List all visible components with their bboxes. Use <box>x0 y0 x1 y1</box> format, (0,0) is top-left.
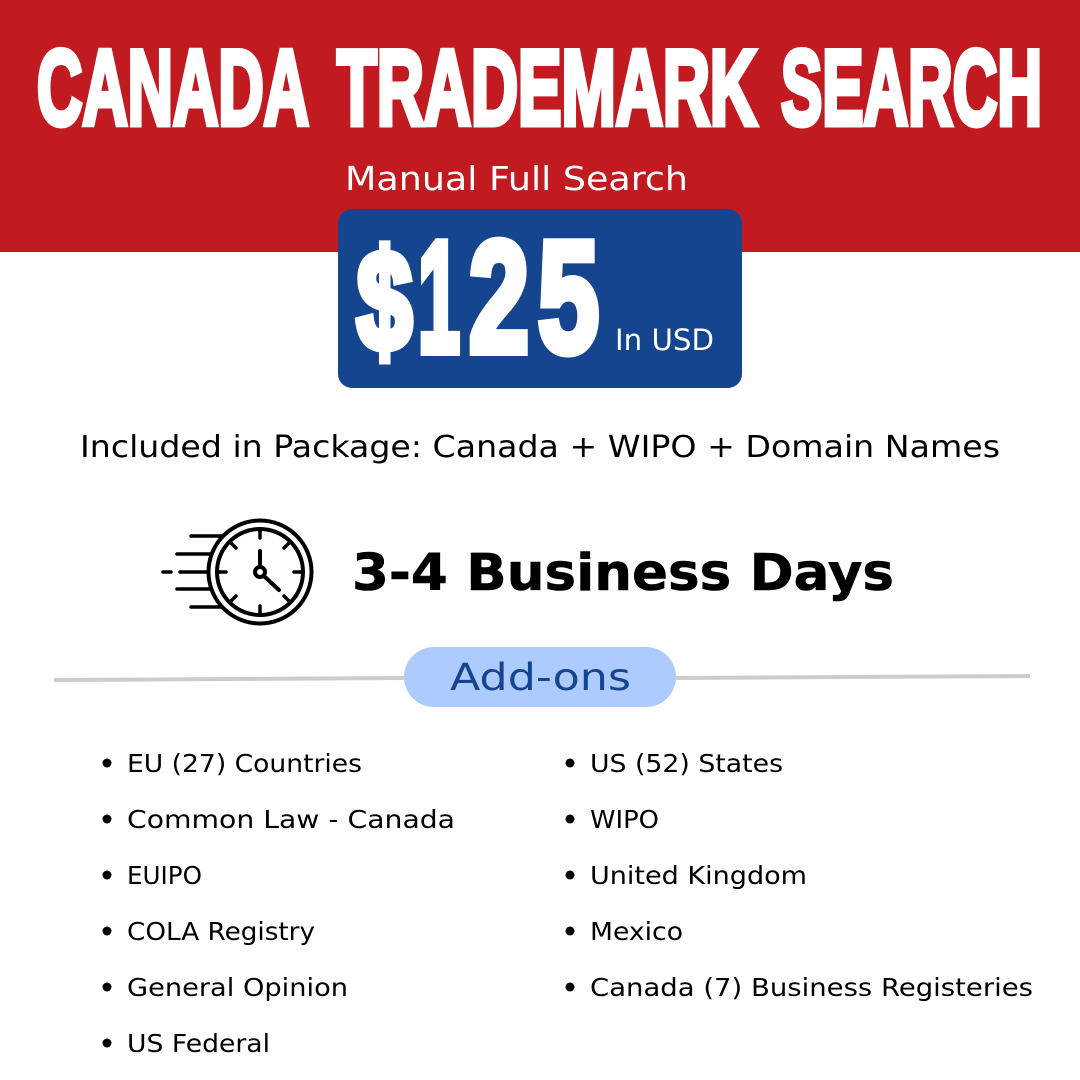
add-ons list: right column <box>566 749 1033 1002</box>
add-ons list: right column: Mexico <box>590 917 683 946</box>
add-ons list: left column <box>102 749 455 1058</box>
add-ons list: left column: US Federal <box>127 1029 270 1058</box>
title: TRADEMARK <box>337 28 757 148</box>
add-ons list: left column: Common Law - Canada <box>127 805 455 834</box>
divider with add-ons label <box>54 647 1030 707</box>
price amount: $ <box>357 222 412 380</box>
price currency note: In USD <box>615 323 714 357</box>
add-ons list: right column: Canada (7) Business Registeries <box>590 973 1033 1002</box>
price amount: 1 <box>418 210 460 386</box>
turnaround time heading: 3-4 Business Days <box>352 544 894 603</box>
add-ons list: right column: US (52) States <box>590 749 783 778</box>
package inclusions text: Included in Package: Canada + WIPO + Domain Names <box>80 430 1000 465</box>
red header band <box>0 0 1080 252</box>
icon: fast clock <box>163 520 312 624</box>
price box <box>338 209 742 388</box>
add-ons list: right column: United Kingdom <box>590 861 807 890</box>
add-ons list: left column: EUIPO <box>127 861 202 890</box>
add-ons list: right column: WIPO <box>590 805 659 834</box>
price amount: 5 <box>538 210 599 386</box>
price amount: 2 <box>469 210 529 386</box>
title <box>37 28 1042 148</box>
add-ons list: left column: General Opinion <box>127 973 348 1002</box>
add-ons list: left column: COLA Registry <box>127 917 315 946</box>
add-ons heading: Add-ons <box>450 656 631 699</box>
price amount <box>357 210 599 386</box>
add-ons list: left column: EU (27) Countries <box>127 749 362 778</box>
subtitle: Manual Full Search <box>345 159 688 198</box>
title: CANADA <box>37 28 309 148</box>
add-ons pill <box>404 647 676 707</box>
